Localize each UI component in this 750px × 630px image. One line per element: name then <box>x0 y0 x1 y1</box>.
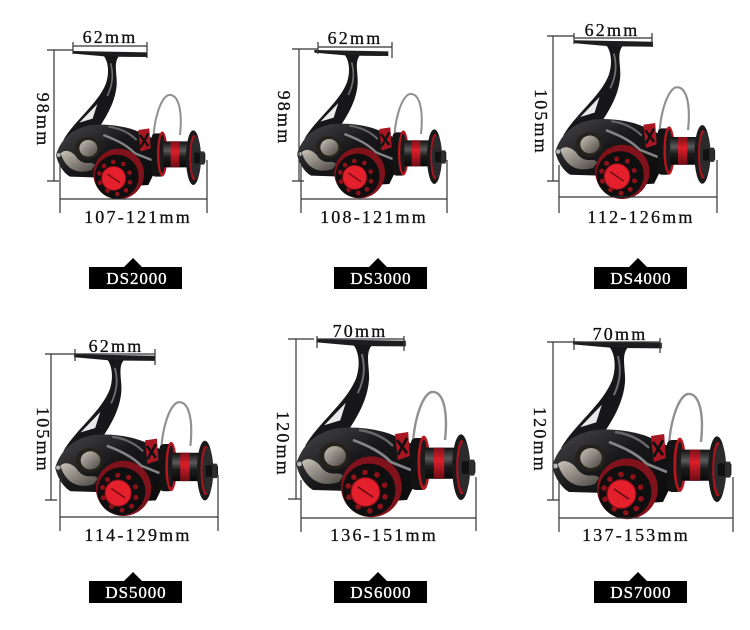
model label: DS4000 <box>594 258 687 289</box>
panel: DS5000 <box>33 336 218 603</box>
model label: DS6000: DS6000 <box>350 583 412 602</box>
length dimension: 107-121mm <box>60 160 207 227</box>
model label: DS5000 <box>89 572 182 603</box>
panel: DS3000 <box>274 28 447 289</box>
model label: DS5000: DS5000 <box>105 583 167 602</box>
length dimension: 136-151mm: 136-151mm <box>330 525 438 545</box>
panel: DS6000 <box>273 321 476 603</box>
height dimension: 105mm <box>531 36 574 181</box>
handle width dimension: 70mm <box>574 324 660 353</box>
handle width dimension: 62mm: 62mm <box>83 27 137 47</box>
handle width dimension: 70mm: 70mm <box>333 321 387 341</box>
reel photo: DS7000 <box>552 341 731 519</box>
handle width dimension: 62mm <box>73 27 147 58</box>
model label: DS6000 <box>334 572 427 603</box>
length dimension: 112-126mm <box>559 160 717 227</box>
height dimension: 105mm <box>33 354 75 500</box>
panel: DS2000 <box>33 27 207 289</box>
height dimension: 98mm <box>274 49 318 181</box>
handle width dimension: 70mm: 70mm <box>593 324 647 344</box>
handle width dimension: 62mm <box>574 20 652 47</box>
model label: DS3000: DS3000 <box>350 269 412 288</box>
reel photo: DS4000 <box>555 40 715 199</box>
height dimension: 105mm: 105mm <box>531 89 551 155</box>
length dimension: 137-153mm: 137-153mm <box>582 525 690 545</box>
length dimension: 114-129mm <box>60 475 218 545</box>
panel: DS7000 <box>530 324 733 603</box>
reel photo: DS2000 <box>56 51 205 199</box>
height dimension: 120mm <box>530 342 573 500</box>
handle width dimension: 62mm: 62mm <box>89 336 143 356</box>
length dimension: 112-126mm: 112-126mm <box>587 207 695 227</box>
handle width dimension: 62mm <box>318 28 392 58</box>
length dimension: 108-121mm <box>301 160 447 227</box>
height dimension: 98mm: 98mm <box>274 91 294 145</box>
model label: DS2000 <box>89 258 182 289</box>
model label: DS2000: DS2000 <box>106 269 168 288</box>
height dimension: 120mm: 120mm <box>530 407 550 473</box>
height dimension: 98mm: 98mm <box>33 93 53 147</box>
length dimension: 108-121mm: 108-121mm <box>320 207 428 227</box>
handle width dimension: 70mm <box>317 321 404 351</box>
model label: DS3000 <box>334 258 427 289</box>
height dimension: 120mm: 120mm <box>273 411 293 477</box>
reel photo: DS5000 <box>55 354 218 516</box>
handle width dimension: 62mm: 62mm <box>328 28 382 48</box>
handle width dimension: 62mm <box>75 336 155 365</box>
panel: DS4000 <box>531 20 717 289</box>
model label: DS7000: DS7000 <box>610 583 672 602</box>
length dimension: 114-129mm: 114-129mm <box>84 525 192 545</box>
model label: DS7000 <box>594 572 687 603</box>
model label: DS4000: DS4000 <box>610 269 672 288</box>
length dimension: 137-153mm <box>559 477 733 545</box>
length dimension: 107-121mm: 107-121mm <box>84 207 192 227</box>
height dimension: 105mm: 105mm <box>33 407 53 473</box>
height dimension: 120mm <box>273 339 314 499</box>
reel photo: DS3000 <box>297 50 446 198</box>
reel photo: DS6000 <box>296 339 475 517</box>
height dimension: 98mm <box>33 50 73 181</box>
handle width dimension: 62mm: 62mm <box>585 20 639 40</box>
length dimension: 136-151mm <box>301 477 476 545</box>
